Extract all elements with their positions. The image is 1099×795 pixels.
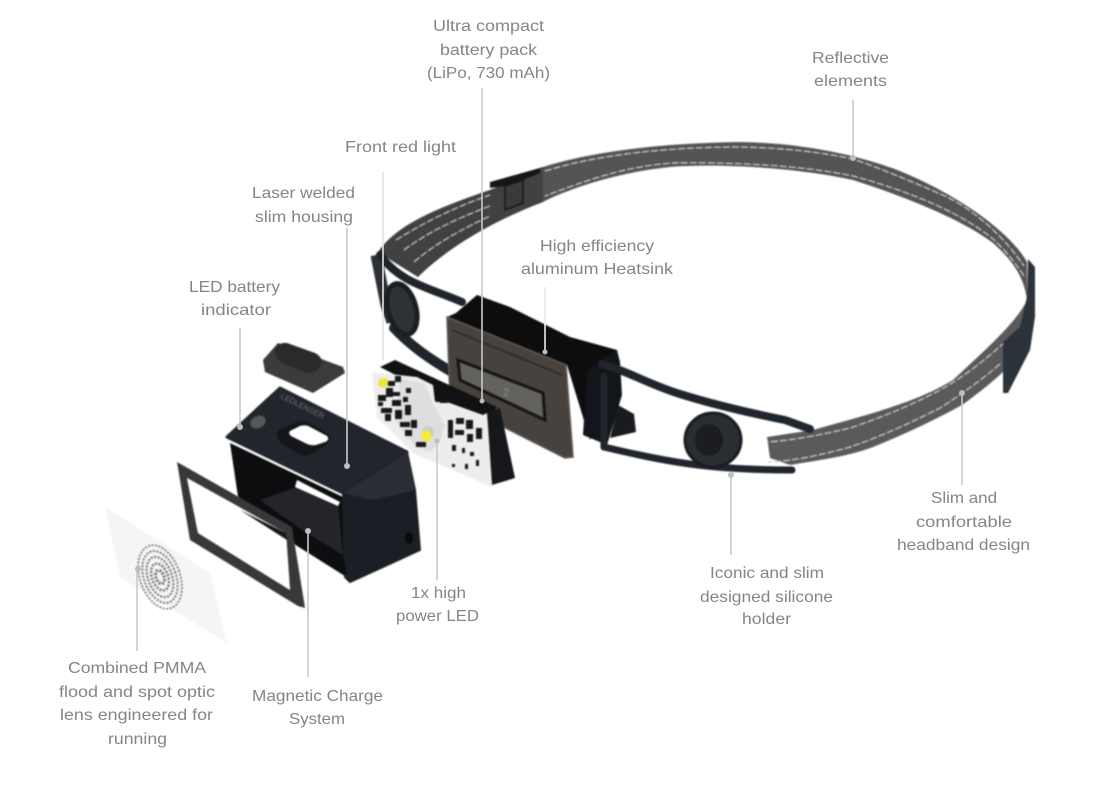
LED circuit board and battery <box>372 360 515 487</box>
heatsink housing back <box>447 295 617 440</box>
label: reflective elements: Reflective <box>812 50 889 67</box>
LED housing <box>227 388 420 582</box>
headband assembly <box>376 142 1035 470</box>
right silicone holder <box>583 350 810 470</box>
lens pattern <box>130 539 190 615</box>
label: optic lens: Combined PMMA <box>68 660 206 677</box>
callout leader lines <box>135 88 965 677</box>
label: battery pack: (LiPo, 730 mAh) <box>427 65 550 82</box>
label: optic lens: flood and spot optic <box>59 684 215 701</box>
interior bottom strip <box>300 532 347 575</box>
label: magnetic charge: System <box>289 711 345 728</box>
label: optic lens: lens engineered for <box>60 707 214 724</box>
label: magnetic charge: Magnetic Charge <box>252 688 383 705</box>
battery pack <box>380 360 515 485</box>
label: silicone holder: Iconic and slim <box>710 565 824 582</box>
label: housing: slim housing <box>255 209 353 226</box>
charging port cutout <box>277 421 330 456</box>
label: power LED <box>396 585 479 625</box>
label: silicone holder: designed silicone <box>700 589 833 606</box>
label: power LED: 1x high <box>411 585 466 602</box>
icon: front red light LED <box>378 378 388 388</box>
label: magnetic charge <box>252 688 383 728</box>
label: optic lens: running <box>108 731 167 748</box>
label: battery indicator: indicator <box>201 302 272 319</box>
label: battery pack: Ultra compact <box>433 18 545 35</box>
strap buckle <box>490 168 540 210</box>
label: headband: headband design <box>897 537 1030 554</box>
rubber button cover <box>263 343 345 393</box>
label: power LED: power LED <box>396 608 479 625</box>
interior floor <box>260 487 343 555</box>
label: front red light: Front red light <box>345 139 457 156</box>
housing side face <box>343 452 420 582</box>
aluminum heatsink plate: 2 <box>503 387 509 399</box>
label: battery pack: battery pack <box>440 42 538 59</box>
aluminum heatsink plate <box>447 317 573 458</box>
label: headband <box>897 490 1030 554</box>
housing top face <box>227 388 407 493</box>
headband: lower strap <box>767 300 1027 465</box>
label: heatsink: High efficiency <box>540 238 654 255</box>
battery indicator window <box>248 413 268 431</box>
left silicone holder <box>376 255 462 372</box>
housing logo: LEDLENSER <box>279 392 326 421</box>
label: heatsink: aluminum Heatsink <box>521 261 674 278</box>
label: battery indicator <box>189 279 280 319</box>
headband: upper strap <box>378 142 1027 300</box>
label: heatsink <box>521 238 674 278</box>
label: housing: Laser welded <box>252 185 355 202</box>
PMMA optic lens <box>105 507 227 643</box>
label: silicone holder <box>700 565 833 628</box>
label: reflective elements: elements <box>814 73 887 90</box>
housing interior <box>230 443 348 578</box>
side screw <box>405 532 413 544</box>
label: battery pack <box>427 18 550 82</box>
housing interior gap <box>295 480 340 506</box>
label: headband: comfortable <box>916 514 1012 531</box>
label: headband: Slim and <box>931 490 997 507</box>
center silicone button <box>685 413 741 467</box>
label: optic lens <box>59 660 215 748</box>
headband: end clip <box>1003 259 1035 393</box>
icon: high power LED <box>420 426 434 442</box>
label: battery indicator: LED battery <box>189 279 280 296</box>
magnetic charge frame <box>177 462 305 608</box>
label: silicone holder: holder <box>742 611 792 628</box>
label: reflective elements <box>812 50 889 90</box>
circuit board <box>372 372 492 487</box>
label: housing <box>252 185 355 226</box>
